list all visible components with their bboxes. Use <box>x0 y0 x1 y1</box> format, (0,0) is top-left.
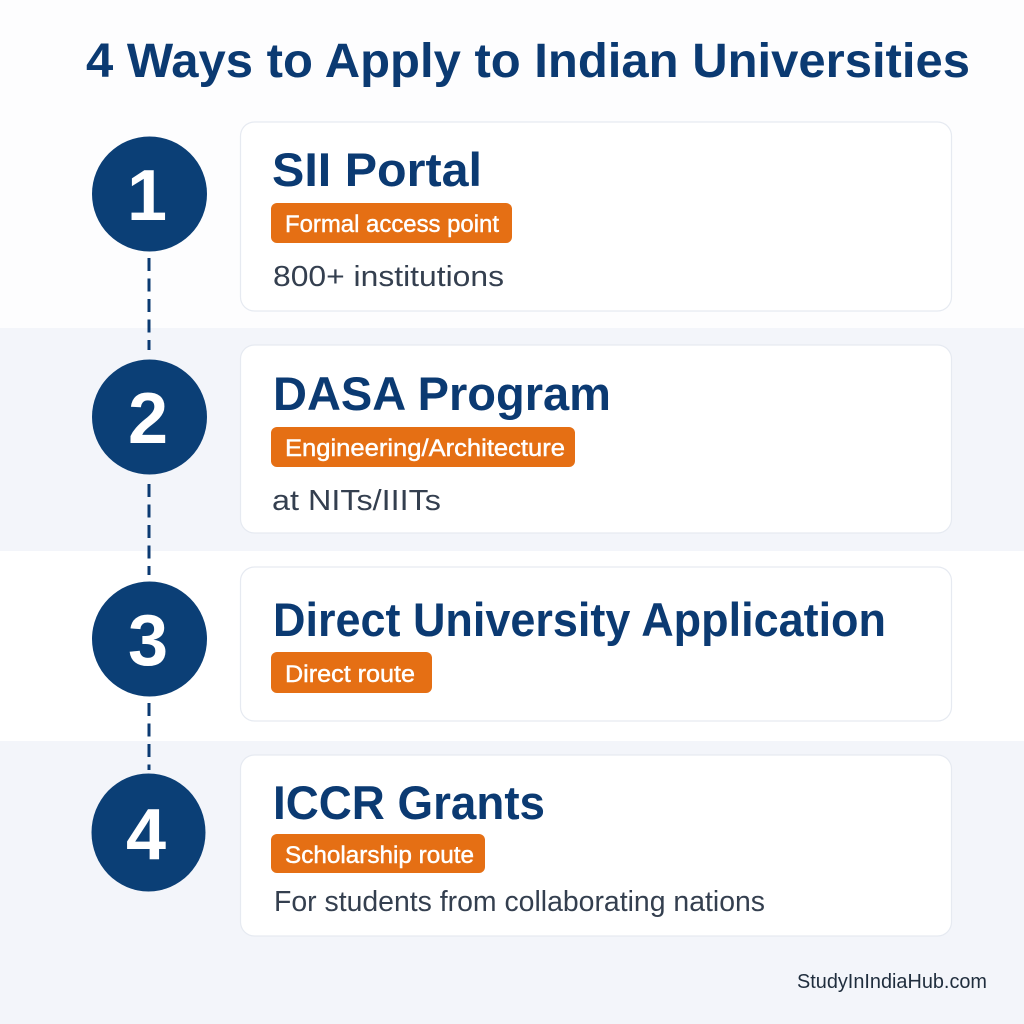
panel: step 2 DASA Program <box>92 345 952 533</box>
panel: step 3 Direct University Application <box>92 567 952 721</box>
number badge 2 <box>92 360 207 474</box>
number badge 4 <box>92 774 206 892</box>
tag: Engineering/Architecture <box>271 427 575 467</box>
tag: Scholarship route <box>271 834 485 873</box>
tag: Formal access point: Formal access point <box>285 211 499 238</box>
panel: step 1 SII Portal <box>92 122 952 311</box>
tag: Direct route <box>271 652 432 693</box>
heading: SII Portal: SII Portal <box>272 143 482 196</box>
description: 800+ institutions: 800+ institutions <box>273 261 504 293</box>
description: at NITs/IIITs: at NITs/IIITs <box>272 485 441 517</box>
number badge 1 <box>92 136 207 252</box>
heading: DASA Program: DASA Program <box>273 367 611 420</box>
panel: step 4 ICCR Grants <box>92 755 952 936</box>
tag: Engineering/Architecture: Engineering/Architecture <box>285 435 565 462</box>
number badge 4: 4 <box>126 795 166 875</box>
footer: source credit: StudyInIndiaHub.com <box>797 971 987 993</box>
description: For students from collaborating nations: For students from collaborating nations <box>274 886 765 918</box>
card 2 background <box>240 345 952 533</box>
number badge 3: 3 <box>128 601 168 681</box>
title: 4 Ways to Apply to Indian Universities <box>86 35 970 88</box>
number badge 3 <box>92 582 207 696</box>
card 1 background <box>240 122 952 311</box>
tag: Scholarship route: Scholarship route <box>285 842 474 869</box>
card 3 background <box>240 567 952 721</box>
number badge 1: 1 <box>127 156 167 236</box>
number badge 2: 2 <box>128 379 168 459</box>
heading: Direct University Application: Direct University Application <box>273 593 886 646</box>
card 4 background <box>240 755 952 936</box>
tag: Formal access point <box>271 203 512 243</box>
tag: Direct route: Direct route <box>285 661 415 688</box>
heading: ICCR Grants: ICCR Grants <box>273 776 545 829</box>
